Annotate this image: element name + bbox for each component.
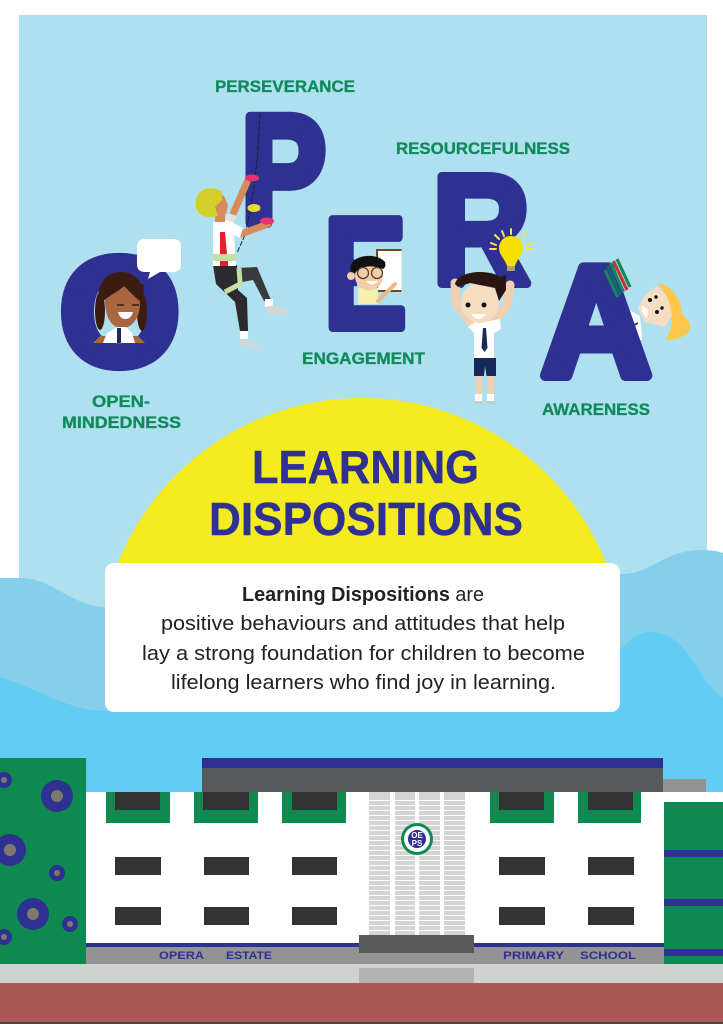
title: LEARNING (252, 441, 479, 493)
panel: definition text box: lifelong learners who find joy in learning. (171, 672, 556, 694)
school logo: PS (412, 839, 423, 848)
panel: definition text box (105, 563, 620, 712)
pavement (0, 964, 723, 984)
red ground (0, 983, 723, 1022)
speech bubble (137, 239, 181, 279)
whiteboard (376, 249, 402, 293)
sign: school name: ESTATE (226, 950, 272, 962)
label: Open-mindedness: MINDEDNESS (62, 414, 181, 432)
title: DISPOSITIONS (209, 493, 523, 545)
school building (0, 758, 723, 1024)
boy holding up letter R (455, 272, 510, 404)
wave: front layer (0, 632, 723, 800)
label: Engagement: ENGAGEMENT (302, 350, 425, 368)
icon: lightbulb (490, 229, 533, 271)
girl character behind A (625, 283, 690, 340)
label: Awareness: AWARENESS (542, 401, 650, 419)
left green wall with circles (0, 758, 86, 964)
letter O with girl (60, 228, 181, 397)
sign: school name: OPERA (159, 950, 204, 962)
title (209, 441, 523, 545)
yellow sun semicircle (99, 398, 625, 924)
letter A: A (542, 233, 651, 409)
girl character (93, 272, 147, 343)
sign: school name: SCHOOL (580, 950, 636, 962)
panel: definition text box: positive behaviours and attitudes that help (161, 613, 565, 635)
sign: school name: PRIMARY (503, 950, 565, 962)
panel: definition text box: lay a strong foundation for children to become (142, 643, 585, 665)
letter E with boy (324, 186, 407, 361)
school logo (401, 823, 433, 855)
school logo: OE (411, 831, 423, 840)
label: Open-mindedness: OPEN- (92, 393, 150, 411)
right green wall (664, 802, 723, 964)
label: Resourcefulness: RESOURCEFULNESS (396, 140, 570, 158)
panel: sky background (19, 15, 707, 615)
panel: definition text box: Learning Dispositions are (242, 584, 484, 606)
building facade (86, 792, 664, 944)
windows (115, 792, 634, 925)
green window frames (106, 792, 641, 823)
boy with glasses (347, 256, 395, 304)
base band (86, 943, 664, 964)
climber character (196, 113, 288, 349)
big letter O: O (60, 228, 180, 397)
letter R: R (432, 143, 530, 316)
big letter E: E (324, 186, 406, 361)
letter P: P (242, 84, 326, 255)
wave: middle layer (0, 550, 723, 760)
label: Open-mindedness (62, 393, 181, 432)
entrance canopy (359, 935, 474, 953)
central striped columns (369, 792, 465, 935)
cover: E counter (357, 243, 407, 303)
entrance steps (359, 968, 474, 984)
sign: school name (159, 950, 636, 962)
icon: stack of books (605, 259, 630, 297)
climbing rope (237, 113, 260, 253)
roof (202, 758, 663, 792)
label: Perseverance: PERSEVERANCE (215, 78, 355, 96)
